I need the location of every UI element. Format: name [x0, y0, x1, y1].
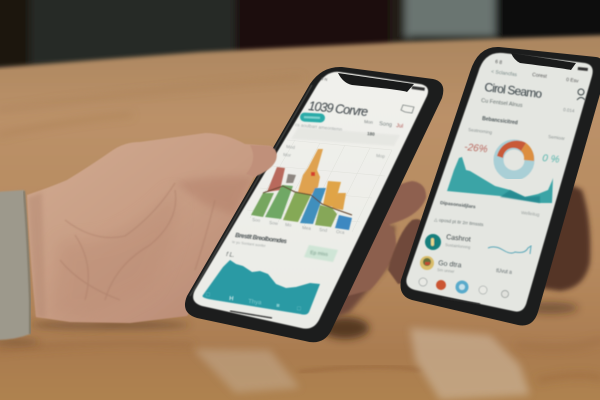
bar red [267, 167, 285, 192]
status labels: < Sclancfas [491, 69, 518, 78]
summary row: Song [379, 121, 392, 128]
palm soft shading [50, 190, 177, 320]
section heading: Brestit Breolbomdes [235, 233, 288, 245]
bar blue 2 [335, 215, 352, 230]
summary row: cs aoulbarr ameontemn [295, 122, 343, 132]
status pill [300, 112, 325, 123]
trend marker [311, 172, 315, 176]
list icon: yellow [420, 256, 434, 270]
light green pill [304, 245, 338, 262]
table reflection left [193, 349, 300, 393]
icon: user [577, 89, 585, 100]
palm lines [60, 183, 215, 300]
status text: 9 N [321, 76, 328, 82]
caption lower right: tUvut a [496, 268, 512, 276]
summary row: Jul [396, 123, 403, 130]
phone 1 [185, 67, 443, 342]
sub labels: Seatnoming [468, 127, 493, 135]
home indicator [442, 298, 480, 304]
small mark labels: f L. [226, 252, 235, 259]
phone body [400, 47, 600, 325]
section label: Bebancsicitred [482, 116, 518, 126]
list text 1 [445, 234, 471, 250]
side highlight [190, 85, 312, 296]
bar orange 2 [323, 181, 341, 207]
chart labels: Mod [286, 144, 296, 150]
wrist shadow [28, 192, 46, 318]
summary row [295, 119, 403, 137]
chart labels: Sow [269, 220, 279, 226]
nav labels: Thya [248, 299, 262, 306]
chart grid [247, 140, 392, 232]
donut base [498, 144, 530, 176]
finger: ring [388, 219, 426, 284]
list text 2: Go dtra [438, 260, 462, 269]
icon: document [401, 105, 414, 113]
chart labels: Mo [285, 222, 292, 228]
nav labels: ■ [276, 303, 280, 309]
phone 2 [400, 47, 600, 325]
status text [321, 76, 425, 91]
bar orange tall [298, 149, 323, 195]
bar orange 3 [332, 193, 346, 210]
chart labels [252, 144, 386, 235]
percent left: -26% [464, 142, 488, 155]
chart labels: Oca [336, 229, 345, 235]
finger: middle [340, 221, 396, 298]
bar grey [286, 174, 296, 183]
section label lower: Dipasonsidjlars [440, 200, 476, 210]
bar green 3 [283, 192, 311, 222]
bar green 1 [251, 193, 274, 217]
shadow under phones [0, 302, 578, 344]
sub labels [468, 107, 575, 141]
phone body [185, 67, 443, 342]
sub labels: Semioar [548, 134, 566, 141]
chart labels: Soo [252, 217, 261, 223]
status labels: 0 Esv [566, 77, 579, 85]
summary row: Mon [364, 119, 374, 125]
bottom nav icons [419, 278, 508, 298]
status labels [491, 59, 588, 85]
section subtext: le yu Sontant sonfer [232, 240, 267, 248]
chart labels: Snd [319, 227, 328, 233]
blurred background wall [0, 0, 600, 70]
chart labels: Mor [283, 152, 292, 158]
bar chart [251, 149, 352, 230]
sub labels: 0.014 [563, 107, 575, 113]
summary row: 180 [367, 131, 375, 137]
caption right: Welleitug [521, 210, 540, 217]
finger: index behind first phone [368, 181, 426, 232]
chart labels: Mop [376, 153, 386, 159]
sparkline [488, 246, 531, 254]
notch [511, 53, 576, 70]
heading: 1039 Corvre [308, 99, 369, 119]
heading: Cirol Seamo [484, 80, 543, 101]
nav labels: H [229, 296, 234, 302]
donut chart [497, 141, 534, 176]
sub heading: Cu Fentsel Alnus [481, 98, 523, 109]
chart labels: Mea [302, 225, 312, 231]
right fingers behind phones [325, 181, 590, 322]
home indicator [230, 311, 272, 318]
list text 2: Sm unner [437, 267, 455, 274]
bar green 2 [265, 185, 293, 219]
nav labels [206, 292, 301, 312]
info row: △ oposd pt 8r 2rr 8mssts [434, 217, 484, 227]
list text 1: Cashrot [446, 234, 471, 244]
table reflection right [410, 328, 530, 400]
screen [406, 53, 593, 312]
bar green 4 [315, 205, 337, 227]
hand holding phone [27, 133, 277, 323]
sleeve [0, 190, 30, 340]
percent right: 0 % [542, 153, 560, 166]
status labels: Corest [532, 72, 548, 80]
light green pill: Ep miss [310, 250, 329, 258]
list text 2 [437, 260, 462, 274]
summary band [291, 127, 400, 146]
bar blue 1 [300, 188, 326, 224]
hand: behind second phone [520, 184, 590, 291]
list text 1: Sustainlonnng [445, 242, 471, 250]
thumb crease shading [175, 177, 255, 215]
list icon: teal [425, 234, 441, 250]
donut orange [521, 143, 534, 161]
notch [338, 73, 414, 92]
screen [193, 72, 428, 329]
nav labels: □ [297, 306, 301, 312]
teal area chart [202, 260, 320, 315]
hand: back of hand behind phone [325, 225, 395, 322]
donut red [497, 141, 526, 158]
nav labels: □ [206, 292, 210, 298]
status labels: 6 8 [495, 59, 503, 66]
area chart [447, 157, 553, 203]
trend line [263, 186, 352, 215]
thumb tip over phone [246, 145, 277, 177]
